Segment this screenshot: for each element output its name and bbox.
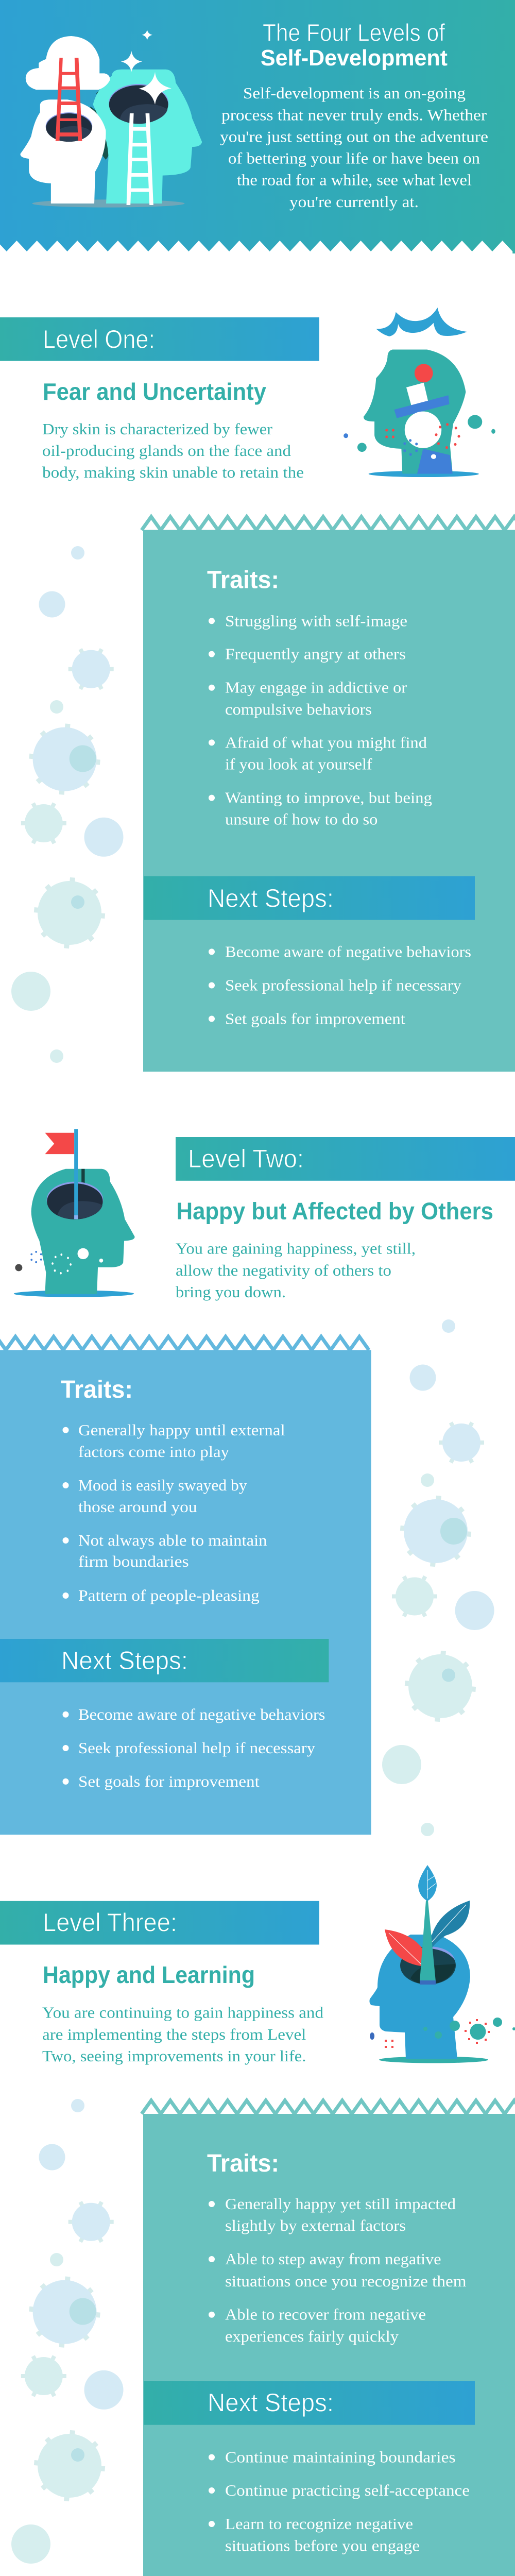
level two description <box>176 1240 416 1301</box>
icon: head with balancing shapes <box>344 308 495 477</box>
traits list: firm boundaries <box>78 1552 189 1570</box>
traits list <box>63 1421 285 1604</box>
next steps list: Become aware of negative behaviors <box>78 1705 325 1723</box>
level two banner: Level Two: <box>188 1144 304 1173</box>
intro text: Self-development is an on-going <box>243 84 466 102</box>
level three description <box>42 2004 324 2065</box>
traits heading: Traits: <box>207 2150 279 2177</box>
traits list: Struggling with self-image <box>225 612 407 630</box>
level two description: allow the negativity of others to <box>176 1261 391 1279</box>
next steps list: Continue maintaining boundaries <box>225 2448 456 2466</box>
title: Self-Development <box>261 45 448 71</box>
title <box>261 19 448 71</box>
title: The Four Levels of <box>263 19 445 46</box>
decorative bubbles left of level one <box>11 546 124 1063</box>
next steps banner <box>144 876 475 920</box>
level one description: Dry skin is characterized by fewer <box>42 420 273 438</box>
next steps list: Learn to recognize negative <box>225 2515 413 2533</box>
intro text: you're just setting out on the adventure <box>220 128 488 145</box>
traits heading: Traits: <box>207 567 279 594</box>
traits list: those around you <box>78 1498 197 1516</box>
level three description: are implementing the steps from Level <box>42 2025 306 2043</box>
level two heading: Happy but Affected by Others <box>176 1197 493 1224</box>
level one banner: Level One: <box>43 325 155 353</box>
next steps banner: Next Steps: <box>61 1646 188 1675</box>
next steps list: Continue practicing self-acceptance <box>225 2481 470 2499</box>
traits list: Mood is easily swayed by <box>78 1476 247 1494</box>
traits list <box>209 2195 467 2345</box>
next steps banner: Next Steps: <box>208 884 334 913</box>
traits list: if you look at yourself <box>225 755 372 773</box>
traits list: factors come into play <box>78 1443 230 1461</box>
traits list: Able to step away from negative <box>225 2250 441 2268</box>
panel: level three traits <box>142 2100 515 2576</box>
traits list <box>209 612 432 828</box>
traits list: Frequently angry at others <box>225 645 406 663</box>
next steps list: situations before you engage <box>225 2536 420 2554</box>
traits list: Wanting to improve, but being <box>225 789 432 807</box>
level two description: bring you down. <box>176 1283 286 1301</box>
intro text: you're currently at. <box>289 193 419 211</box>
traits list: unsure of how to do so <box>225 810 377 828</box>
traits list: Not always able to maintain <box>78 1531 267 1549</box>
next steps banner <box>144 2381 475 2425</box>
level one description <box>42 420 304 481</box>
next steps list <box>209 2448 470 2554</box>
icon: head with growing plant <box>369 1865 515 2063</box>
level three description: Two, seeing improvements in your life. <box>42 2047 306 2065</box>
next steps list: Set goals for improvement <box>78 1772 260 1790</box>
icon: head with flag <box>14 1129 135 1297</box>
traits heading: Traits: <box>61 1376 133 1403</box>
traits list: Pattern of people-pleasing <box>78 1586 260 1604</box>
level three banner: Level Three: <box>43 1908 177 1937</box>
level one heading: Fear and Uncertainty <box>43 378 266 405</box>
next steps list <box>63 1705 325 1790</box>
level one description: oil-producing glands on the face and <box>42 442 291 460</box>
panel: level one traits <box>142 517 515 1072</box>
level three banner <box>0 1901 319 1944</box>
next steps banner <box>0 1639 329 1682</box>
level one description: body, making skin unable to retain the <box>42 463 304 481</box>
next steps banner: Next Steps: <box>208 2388 334 2417</box>
level one banner <box>0 317 319 361</box>
panel: level two traits <box>0 1336 371 1835</box>
traits list: Able to recover from negative <box>225 2306 426 2324</box>
traits list: Afraid of what you might find <box>225 733 427 751</box>
level three heading: Happy and Learning <box>43 1961 255 1988</box>
intro text: of bettering your life or have been on <box>228 149 480 167</box>
traits list: compulsive behaviors <box>225 700 372 718</box>
next steps list <box>209 942 471 1027</box>
traits list: Generally happy until external <box>78 1421 285 1439</box>
decorative bubbles left of level three <box>11 2099 124 2576</box>
level two banner <box>176 1137 515 1181</box>
decorative bubbles right of level two <box>382 1319 494 1836</box>
next steps list: Seek professional help if necessary <box>78 1739 316 1757</box>
traits list: situations once you recognize them <box>225 2272 467 2290</box>
traits list: slightly by external factors <box>225 2216 406 2234</box>
icon: two heads with ladders <box>20 29 202 208</box>
level three description: You are continuing to gain happiness and <box>42 2004 324 2022</box>
intro text: process that never truly ends. Whether <box>221 106 487 124</box>
intro text <box>220 84 488 211</box>
traits list: Generally happy yet still impacted <box>225 2195 456 2213</box>
next steps list: Become aware of negative behaviors <box>225 942 471 960</box>
next steps list: Set goals for improvement <box>225 1010 405 1027</box>
intro text: the road for a while, see what level <box>237 171 472 189</box>
next steps list: Seek professional help if necessary <box>225 976 462 994</box>
traits list: experiences fairly quickly <box>225 2327 399 2345</box>
traits list: May engage in addictive or <box>225 679 407 697</box>
level two description: You are gaining happiness, yet still, <box>176 1240 416 1258</box>
header banner <box>0 0 515 258</box>
